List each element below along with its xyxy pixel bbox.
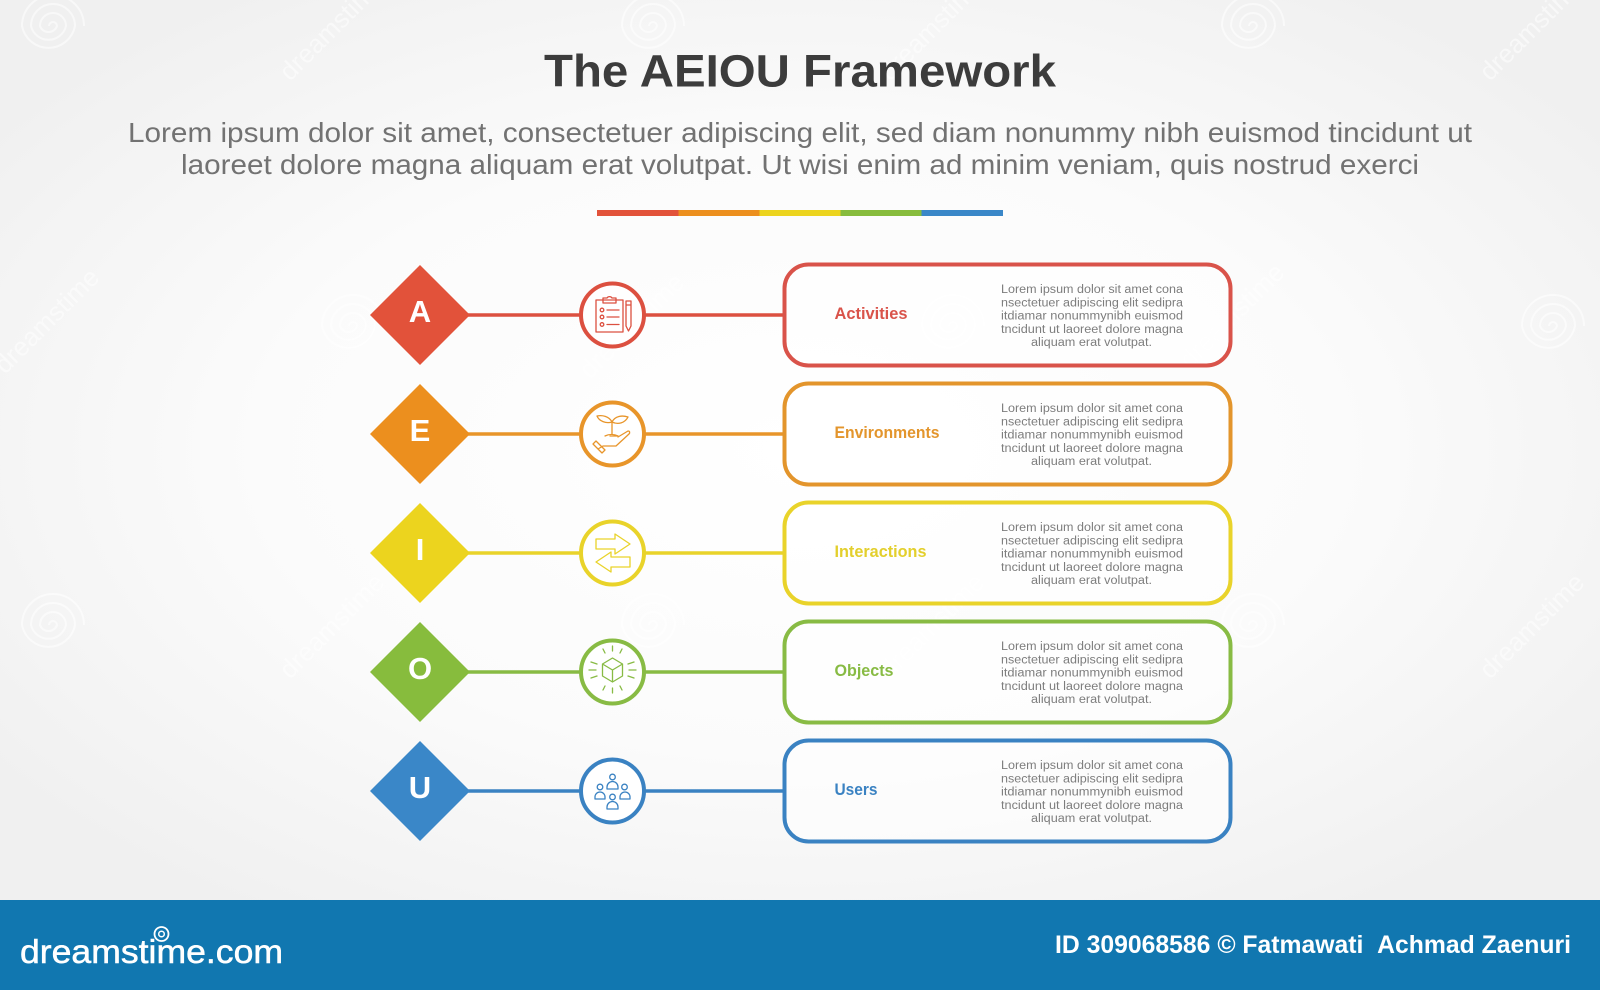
watermark pattern: [0, 0, 1590, 684]
box: Objects: nsectetuer adipiscing elit sedipra: [1001, 654, 1184, 666]
box: Activities: aliquam erat volutpat.: [1031, 337, 1152, 349]
diamond O: [370, 622, 470, 722]
box: Interactions: Interactions: [834, 543, 926, 561]
diamond I: I: [416, 532, 424, 567]
box: Users: [784, 740, 1230, 842]
subtitle: [128, 117, 1472, 180]
icon: clipboard: [581, 284, 644, 346]
box: Activities: Lorem ipsum dolor sit amet cona: [1001, 284, 1184, 296]
connector line O: [460, 670, 785, 674]
box: Activities: [784, 264, 1230, 366]
box: Environments: Environments: [834, 424, 940, 442]
diamond I: [370, 503, 470, 603]
watermark pattern: dreamstime: [1473, 567, 1590, 684]
box: Users: Lorem ipsum dolor sit amet cona: [1001, 760, 1184, 772]
diamond E: [370, 384, 470, 484]
box: Objects: itdiamar nonummynibh euismod: [1001, 668, 1183, 680]
box: Objects: Lorem ipsum dolor sit amet cona: [1001, 641, 1184, 653]
title: The AEIOU Framework: [544, 46, 1057, 96]
subtitle: Lorem ipsum dolor sit amet, consectetuer adipiscing elit, sed diam nonummy nibh euismod tincidunt ut: [128, 117, 1472, 148]
box: Users: nsectetuer adipiscing elit sedipra: [1001, 773, 1184, 785]
box: Interactions: tncidunt ut laoreet dolore magna: [1001, 562, 1184, 574]
box: Objects: Objects: [834, 662, 894, 680]
watermark pattern: dreamstime: [873, 567, 990, 684]
connector line U: [460, 789, 785, 793]
box: Objects: [784, 622, 1230, 722]
box: Interactions: [784, 502, 1230, 604]
footer band: [0, 900, 1600, 990]
row: Objects: [370, 622, 1230, 722]
box: Users: aliquam erat volutpat.: [1031, 813, 1152, 825]
row: Users: [370, 740, 1230, 842]
watermark pattern: dreamstime: [573, 267, 690, 384]
subtitle: laoreet dolore magna aliquam erat volutpat. Ut wisi enim ad minim veniam, quis nostrud exerci: [181, 149, 1419, 180]
diamond O: O: [408, 651, 432, 686]
icon: glowing cube: [581, 640, 644, 704]
box: Activities: itdiamar nonummynibh euismod: [1001, 311, 1183, 323]
watermark pattern: dreamstime: [273, 567, 390, 684]
row: Environments: [370, 384, 1230, 484]
diamond A: A: [409, 294, 431, 329]
box: Environments: itdiamar nonummynibh euismod: [1001, 430, 1183, 442]
connector line E: [460, 432, 785, 436]
box: Users: itdiamar nonummynibh euismod: [1001, 787, 1183, 799]
diamond A: [370, 265, 470, 365]
connector line A: [460, 313, 785, 317]
rainbow divider: [597, 210, 1003, 216]
icon: hand with plant: [581, 402, 644, 466]
box: Interactions: Lorem ipsum dolor sit amet cona: [1001, 522, 1184, 534]
box: Objects: tncidunt ut laoreet dolore magna: [1001, 681, 1184, 693]
box: Users: tncidunt ut laoreet dolore magna: [1001, 800, 1184, 812]
diamond U: U: [409, 770, 431, 805]
box: Activities: nsectetuer adipiscing elit sedipra: [1001, 297, 1184, 309]
box: Environments: aliquam erat volutpat.: [1031, 456, 1152, 468]
connector line I: [460, 551, 785, 555]
watermark pattern: dreamstime: [1173, 257, 1290, 374]
box: Interactions: nsectetuer adipiscing elit sedipra: [1001, 535, 1184, 547]
footer logo: dreamstime.com: [20, 933, 283, 970]
box: Objects: aliquam erat volutpat.: [1031, 694, 1152, 706]
box: Activities: tncidunt ut laoreet dolore magna: [1001, 324, 1184, 336]
icon: group of users: [581, 760, 644, 822]
box: Environments: tncidunt ut laoreet dolore magna: [1001, 443, 1184, 455]
box: Environments: Lorem ipsum dolor sit amet cona: [1001, 403, 1184, 415]
footer credit: ID 309068586 © Fatmawati Achmad Zaenuri: [1055, 931, 1571, 959]
diamond E: E: [410, 413, 430, 448]
row: Interactions: [370, 502, 1230, 604]
row: Activities: [370, 264, 1230, 366]
box: Environments: nsectetuer adipiscing elit sedipra: [1001, 416, 1184, 428]
box: Interactions: aliquam erat volutpat.: [1031, 575, 1152, 587]
box: Interactions: itdiamar nonummynibh euismod: [1001, 549, 1183, 561]
box: Users: Users: [834, 781, 878, 799]
icon: exchange arrows: [581, 522, 644, 584]
diamond U: [370, 741, 470, 841]
box: Environments: [784, 384, 1230, 484]
box: Activities: Activities: [834, 305, 908, 323]
